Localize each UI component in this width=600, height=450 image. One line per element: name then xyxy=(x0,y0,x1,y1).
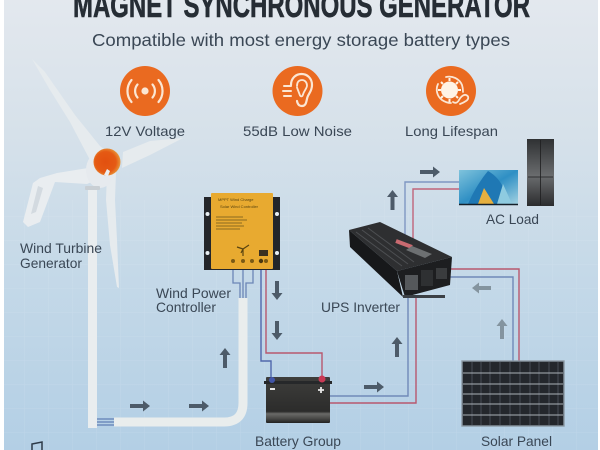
wiring: controller to battery xyxy=(261,270,271,380)
arrow: battery to inverter up xyxy=(392,337,402,357)
label: 12V voltage: 12V Voltage xyxy=(105,123,185,139)
turbine orange hub xyxy=(94,148,120,176)
label: wind power controller: Controller xyxy=(156,299,216,315)
wiring: battery red line xyxy=(266,270,322,378)
wiring: tower cable end xyxy=(97,419,114,425)
wiring: white cable from tower to controller xyxy=(114,298,243,422)
label: wind turbine generator: Wind Turbine xyxy=(20,240,102,256)
turbine lower blade xyxy=(106,172,119,288)
wiring: battery to inverter xyxy=(328,296,408,396)
arrow: controller down 2 xyxy=(272,321,282,340)
battery positive terminal xyxy=(318,376,326,382)
wiring: inverter to AC load xyxy=(405,182,460,240)
arrow: tower cable right 1 xyxy=(130,400,150,412)
arrow: tower cable right 2 xyxy=(189,400,209,412)
label: AC load: AC Load xyxy=(486,211,539,227)
arrow: solar left xyxy=(472,282,491,294)
battery group xyxy=(264,376,332,423)
icon: ear with sound lines xyxy=(272,66,322,116)
UPS inverter xyxy=(349,222,452,298)
controller mounting flange xyxy=(204,197,280,270)
subtitle: Compatible with most energy storage battery types xyxy=(92,30,510,50)
turbine upper blade xyxy=(32,59,105,160)
icon: music note fragment xyxy=(32,442,42,450)
wind turbine xyxy=(23,59,183,428)
battery negative terminal xyxy=(269,377,275,383)
label: 55dB low noise: 55dB Low Noise xyxy=(243,123,352,139)
turbine tower xyxy=(88,190,97,428)
turbine right blade xyxy=(122,138,183,168)
feature: 12V voltage xyxy=(105,66,185,139)
label: battery group: Battery Group xyxy=(255,433,341,449)
feature: long lifespan xyxy=(405,66,498,139)
AC load: refrigerator xyxy=(527,139,554,206)
label: solar panel: Solar Panel xyxy=(481,433,552,449)
inverter top xyxy=(349,222,452,271)
label: long lifespan: Long Lifespan xyxy=(405,123,498,139)
label: wind power controller: Wind Power xyxy=(156,285,231,301)
inverter front panel xyxy=(397,257,452,297)
turbine tail fin xyxy=(23,168,96,227)
arrow: cable up xyxy=(220,348,230,368)
wind power controller xyxy=(204,193,280,270)
wind power controller: MPPT Wind Charge xyxy=(218,197,254,202)
arrow: solar up xyxy=(496,319,508,339)
wiring: controller input wires xyxy=(233,270,253,298)
wind power controller: Solar Wind Controller xyxy=(220,204,259,209)
solar panel xyxy=(462,361,564,426)
AC load: TV xyxy=(459,170,518,205)
feature: 55dB low noise xyxy=(243,66,352,139)
arrow: controller down 1 xyxy=(272,281,282,300)
icon: vibration signal xyxy=(120,66,170,116)
arrow: load right xyxy=(420,166,440,178)
inverter left side xyxy=(349,230,403,297)
turbine nacelle xyxy=(86,152,114,188)
arrows: flow direction xyxy=(130,166,508,412)
icon: gear with cycle xyxy=(426,66,476,116)
label: UPS inverter: UPS Inverter xyxy=(321,299,400,315)
label: wind turbine generator: Generator xyxy=(20,255,82,271)
arrow: battery right xyxy=(364,382,384,392)
arrow: inverter to load up xyxy=(387,190,398,210)
wiring: solar to inverter xyxy=(449,277,513,362)
controller yellow face xyxy=(211,193,273,269)
